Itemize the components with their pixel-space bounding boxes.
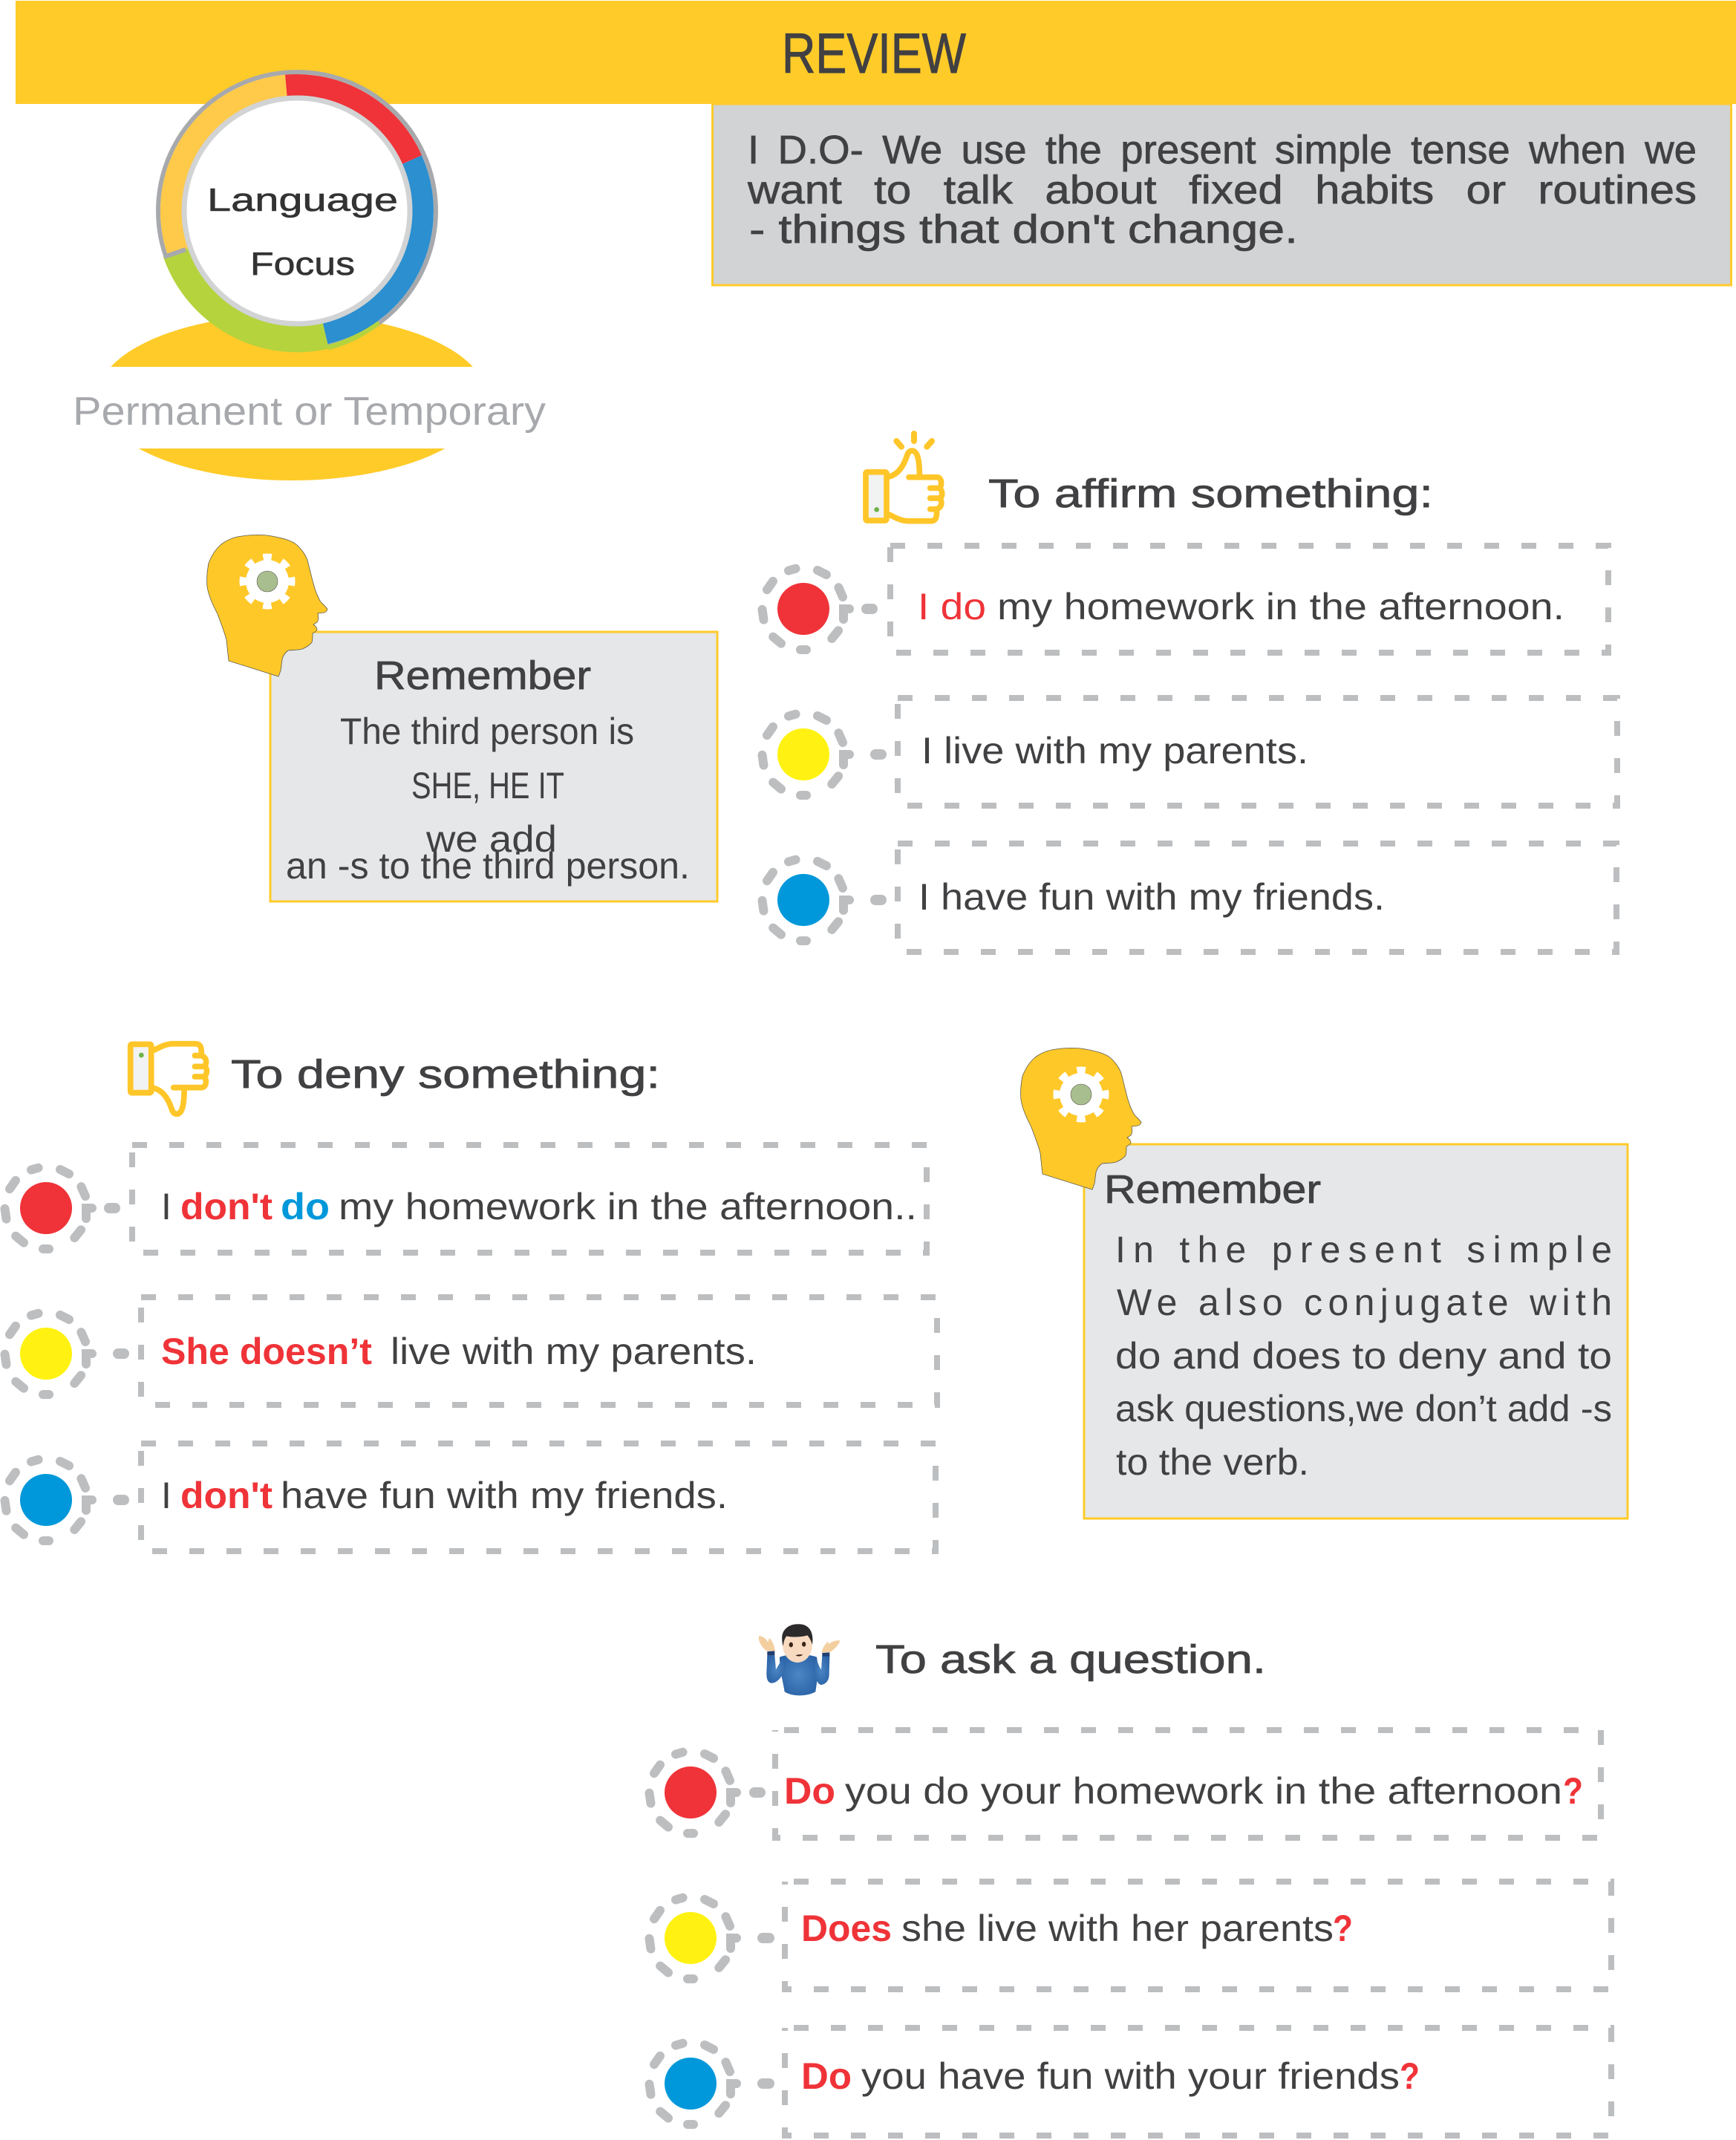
ring label: Focus: [250, 246, 355, 282]
heading: affirm: To affirm something:: [988, 472, 1433, 516]
definition text: I D.O- We use the present simple tense when we: [748, 128, 1697, 172]
header banner: [16, 1, 1736, 104]
question row 2: ?: [1333, 1908, 1353, 1949]
remember heading: Remember: [374, 653, 591, 698]
remember heading: Remember: [1104, 1167, 1321, 1212]
icon: thumbs up: [866, 434, 942, 521]
affirm row 1: my homework in the afternoon.: [997, 586, 1564, 627]
panel: definition: [713, 104, 1732, 285]
deny row 2: [4, 1297, 937, 1405]
question row 2: she live with her parents: [901, 1908, 1334, 1949]
remember text: do and does to deny and to: [1115, 1335, 1612, 1377]
question row 3: Do: [801, 2055, 852, 2097]
question row 2: Does: [801, 1908, 892, 1949]
panel: remember third person: [270, 632, 717, 901]
question row 1: [649, 1730, 1601, 1838]
ring label: [207, 182, 398, 282]
deny row 3: [4, 1443, 936, 1551]
affirm row 3: [762, 844, 1616, 952]
remember text: an -s to the third person.: [286, 845, 690, 887]
question row 1: ?: [1563, 1770, 1583, 1812]
icon: shrugging man: [759, 1624, 840, 1695]
heading: deny: To deny something:: [231, 1052, 660, 1097]
deny row 1: [4, 1145, 927, 1253]
deny row 2: She doesn’t: [161, 1331, 372, 1372]
deny row 1: do: [281, 1186, 330, 1227]
affirm row 1: I do: [918, 586, 986, 627]
remember text: [286, 711, 690, 887]
affirm row 3: I have fun with my friends.: [918, 876, 1385, 918]
definition text: want to talk about fixed habits or routines: [747, 168, 1697, 212]
icon: thumbs down: [131, 1044, 206, 1114]
affirm row 2: I live with my parents.: [921, 730, 1308, 771]
affirm row 1: [762, 546, 1608, 653]
title: REVIEW: [782, 22, 966, 85]
icon: head with gear: [207, 535, 327, 676]
deny row 1: my homework in the afternoon..: [339, 1186, 917, 1227]
subtitle: Permanent or Temporary: [73, 389, 546, 434]
deny row 1: I: [161, 1186, 172, 1227]
language focus ring: [158, 72, 436, 350]
question row 1: you do your homework in the afternoon: [845, 1770, 1562, 1812]
heading: question: To ask a question.: [875, 1637, 1266, 1682]
deny row 2: live with my parents.: [391, 1331, 757, 1372]
remember text: we add: [425, 818, 557, 860]
remember text: ask questions,we don’t add -s: [1115, 1388, 1612, 1429]
remember text: The third person is: [340, 711, 634, 752]
remember text: SHE, HE IT: [411, 765, 564, 806]
ring label: Language: [207, 182, 398, 218]
icon: head with gear: [1021, 1048, 1141, 1190]
remember text: In the present simple: [1115, 1229, 1612, 1270]
definition text: - things that don't change.: [749, 207, 1298, 252]
question row 2: [649, 1882, 1611, 1989]
definition text: [747, 128, 1697, 252]
remember text: We also conjugate with: [1117, 1282, 1612, 1323]
deny row 1: don't: [180, 1186, 273, 1227]
panel: remember present simple: [1084, 1144, 1628, 1518]
deny row 3: don't: [180, 1475, 273, 1516]
yellow ellipse badge: [97, 314, 486, 480]
question row 3: you have fun with your friends: [861, 2055, 1400, 2097]
question row 3: ?: [1400, 2055, 1420, 2097]
question row 3: [649, 2028, 1611, 2136]
question row 1: Do: [784, 1770, 835, 1812]
deny row 3: I: [161, 1475, 172, 1516]
remember text: [1115, 1229, 1612, 1483]
subtitle: [59, 367, 549, 448]
affirm row 2: [762, 698, 1617, 806]
deny row 3: have fun with my friends.: [281, 1475, 728, 1516]
remember text: to the verb.: [1116, 1441, 1309, 1483]
